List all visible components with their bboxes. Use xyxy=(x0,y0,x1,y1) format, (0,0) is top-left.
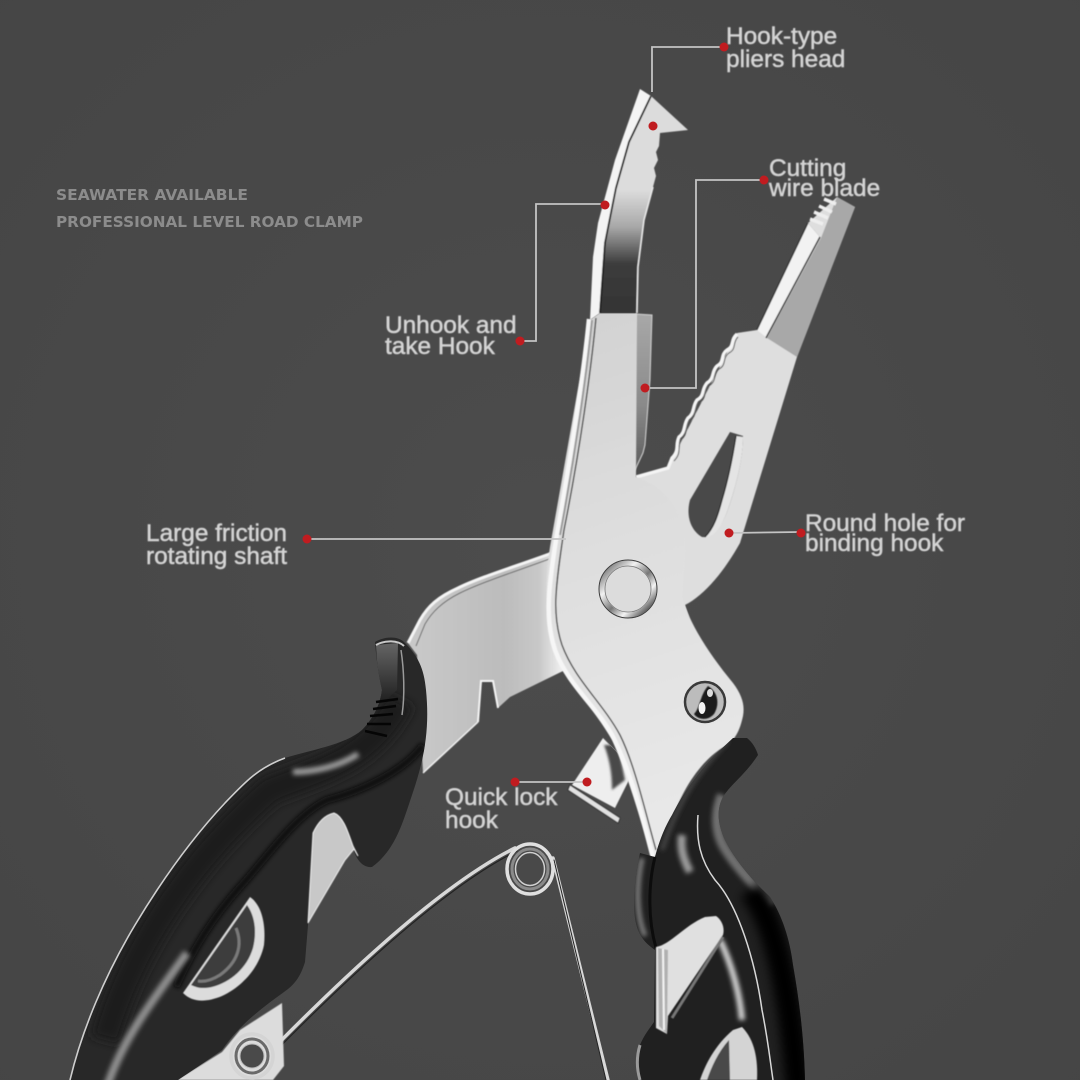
callout: large friction rotating shaft: Large friction xyxy=(146,520,287,547)
pivot rivet xyxy=(599,560,657,618)
callout: large friction rotating shaft: rotating shaft xyxy=(146,543,287,570)
left black handle xyxy=(70,638,427,1080)
serrated edge xyxy=(636,334,737,477)
callout: unhook and take hook: Unhook and xyxy=(385,312,517,339)
callout: unhook and take hook xyxy=(385,200,610,360)
right black handle xyxy=(634,738,805,1080)
handle rim lines xyxy=(70,641,404,1080)
wire spring xyxy=(262,844,608,1080)
main plate xyxy=(546,313,744,858)
callout: large friction rotating shaft xyxy=(146,520,566,570)
handle shading xyxy=(105,643,423,1080)
callout: cutting wire blade: Cutting xyxy=(769,155,846,182)
callout: quick lock hook xyxy=(445,778,592,834)
pliers illustration xyxy=(70,89,855,1080)
jaw teeth xyxy=(810,199,836,224)
lock rivet xyxy=(685,682,725,722)
callout: quick lock hook: Quick lock xyxy=(445,784,558,811)
callout: hook-type pliers head xyxy=(648,23,845,130)
round hole in right jaw xyxy=(688,432,743,537)
left lower silver plate xyxy=(177,1003,284,1080)
quick lock hook xyxy=(568,738,634,823)
callout: hook-type pliers head: pliers head xyxy=(726,46,845,73)
handle ring xyxy=(700,1027,757,1080)
callout: cutting wire blade xyxy=(640,155,880,392)
left handle ring hole xyxy=(183,897,264,1001)
grip ribs xyxy=(365,699,398,736)
heading text: SEAWATER AVAILABLE xyxy=(56,186,248,204)
heading text xyxy=(56,186,363,231)
callout: round hole for binding hook xyxy=(724,510,965,557)
callout: unhook and take hook: take Hook xyxy=(385,333,496,360)
heading text: PROFESSIONAL LEVEL ROAD CLAMP xyxy=(56,213,363,231)
right jaw xyxy=(636,197,855,620)
callout: hook-type pliers head: Hook-type xyxy=(726,23,837,50)
left handle silver window xyxy=(308,813,358,923)
long hooked jaw xyxy=(590,89,688,320)
left silver lever xyxy=(408,553,565,773)
handle silver window xyxy=(656,916,724,1034)
callout: round hole for binding hook: Round hole for xyxy=(805,510,965,537)
bottom coil xyxy=(231,1034,273,1078)
callout: quick lock hook: hook xyxy=(445,807,499,834)
handle shading xyxy=(638,740,798,1080)
callout: round hole for binding hook: binding hook xyxy=(805,530,944,557)
callout: cutting wire blade: wire blade xyxy=(768,175,880,202)
small blade behind long jaw xyxy=(630,314,652,470)
